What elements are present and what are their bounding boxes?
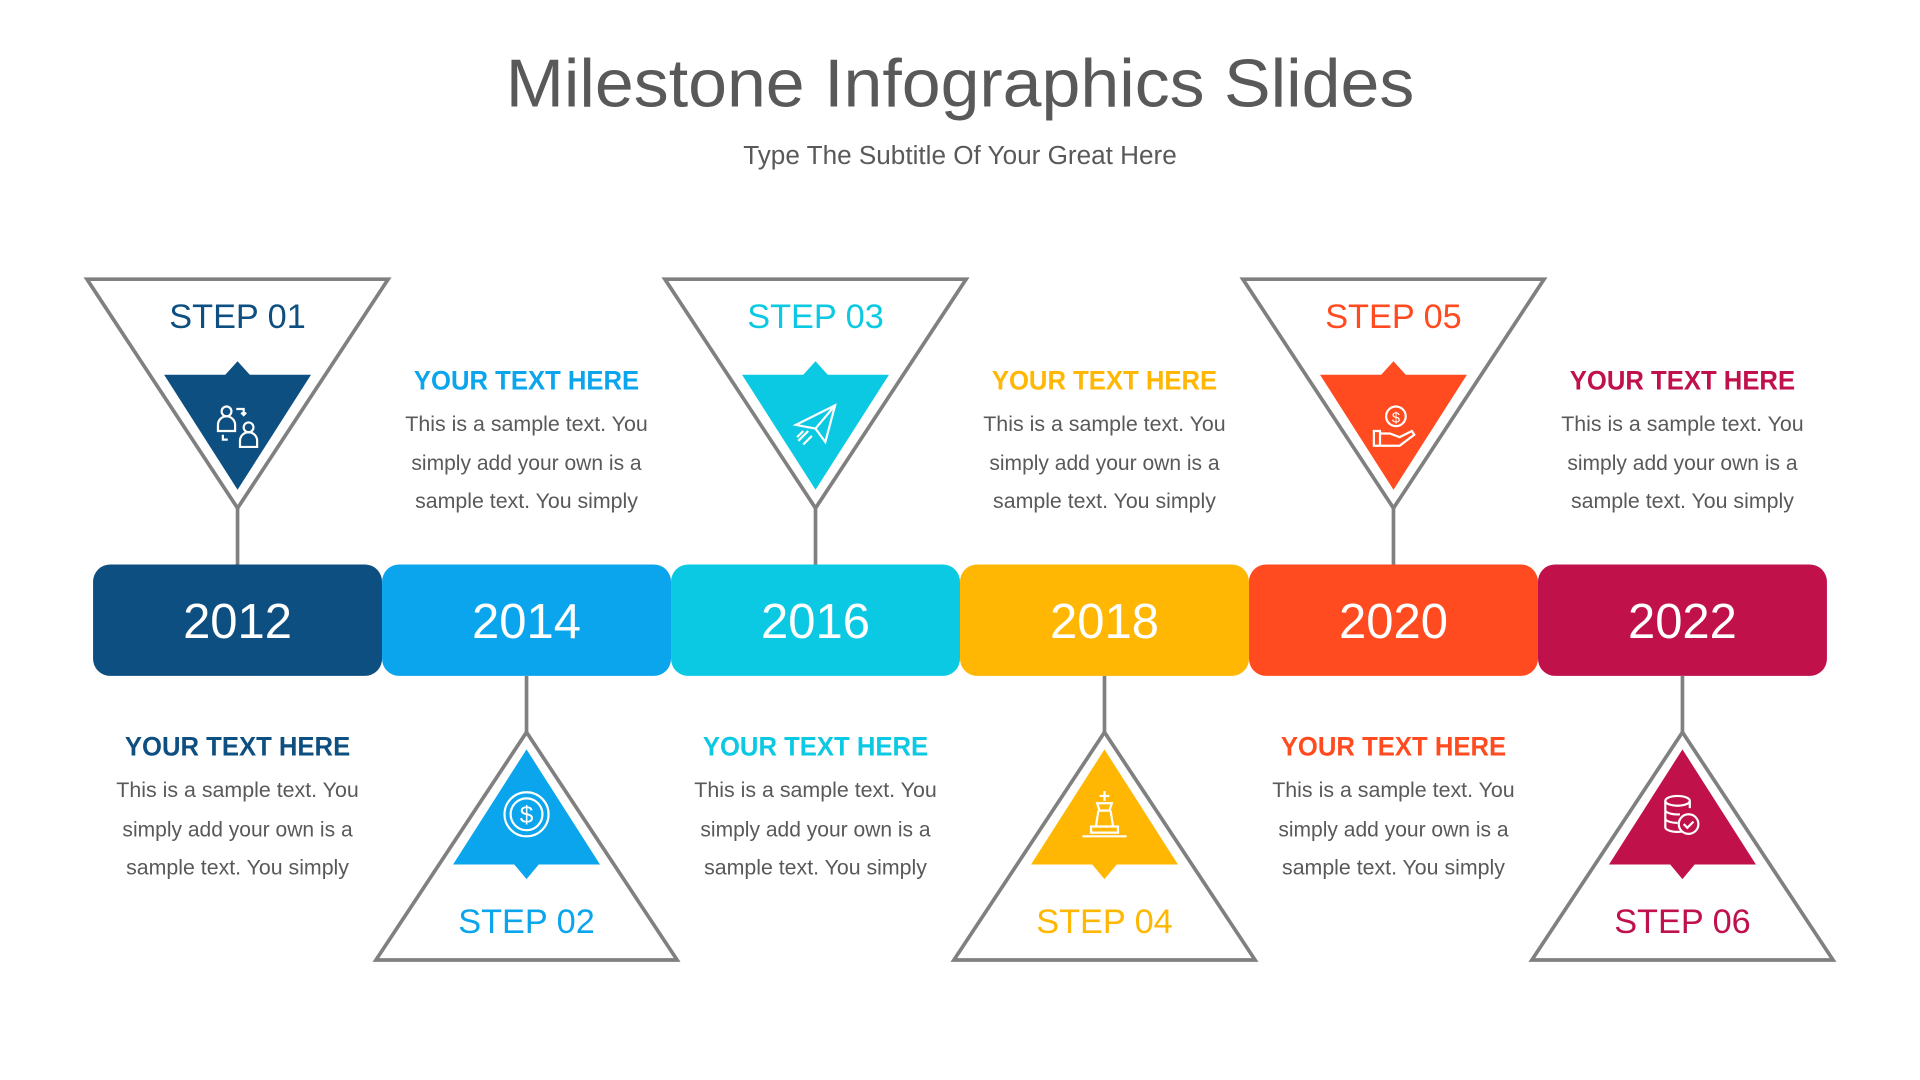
text block: 2014: sample text. You simply	[415, 490, 639, 513]
text block: 2012: This is a sample text. You	[116, 779, 359, 802]
text block: 2018: sample text. You simply	[993, 490, 1217, 513]
text block: 2016: YOUR TEXT HERE	[703, 732, 928, 762]
text block: 2014	[405, 365, 648, 513]
text block: 2016: sample text. You simply	[704, 856, 928, 879]
text block: 2020: This is a sample text. You	[1272, 779, 1515, 802]
step 04 marker	[954, 676, 1255, 960]
step 05 marker	[1243, 279, 1544, 564]
step 05 marker: STEP 05	[1325, 298, 1462, 336]
step 01 marker	[87, 279, 388, 564]
text block: 2014: This is a sample text. You	[405, 413, 648, 436]
title: Milestone Infographics Slides	[506, 47, 1414, 122]
text block: 2022	[1561, 365, 1804, 513]
icon: hand with coin	[1374, 407, 1414, 446]
icon: database check	[1665, 796, 1698, 834]
timeline year bars: 2018	[1050, 595, 1159, 649]
text block: 2012	[116, 732, 359, 879]
timeline year bars: 2020	[1339, 595, 1448, 649]
text block: 2014: simply add your own is a	[411, 452, 642, 475]
text block: 2020: sample text. You simply	[1282, 856, 1506, 879]
step 03 marker: STEP 03	[747, 298, 884, 336]
timeline year bars: 2014	[472, 595, 581, 649]
text block: 2012: simply add your own is a	[122, 818, 353, 841]
icon: chess king	[1082, 791, 1127, 836]
text block: 2022: YOUR TEXT HERE	[1570, 365, 1795, 395]
icon: people exchange	[218, 407, 257, 447]
text block: 2016	[694, 732, 937, 879]
text block: 2018: This is a sample text. You	[983, 413, 1226, 436]
text block: 2020: simply add your own is a	[1278, 818, 1509, 841]
subtitle: Type The Subtitle Of Your Great Here	[743, 142, 1177, 170]
step 02 marker	[376, 676, 677, 960]
timeline year bars: 2012	[183, 595, 292, 649]
text block: 2018	[983, 365, 1226, 513]
step 03 marker	[665, 279, 966, 564]
text block: 2020	[1272, 732, 1515, 879]
text block: 2012: YOUR TEXT HERE	[125, 732, 350, 762]
text block: 2022: simply add your own is a	[1567, 452, 1798, 475]
timeline year bars: 2022	[1628, 595, 1737, 649]
icon: hand with coin: $	[1392, 410, 1400, 426]
text block: 2022: sample text. You simply	[1571, 490, 1794, 513]
text block: 2020: YOUR TEXT HERE	[1281, 732, 1506, 762]
step 06 marker	[1532, 676, 1833, 960]
timeline year bars: 2016	[761, 595, 870, 649]
step 02 marker: STEP 02	[458, 903, 595, 941]
icon: dollar coin: $	[520, 802, 534, 829]
text block: 2016: simply add your own is a	[700, 818, 931, 841]
timeline year bars	[93, 564, 1827, 676]
step 06 marker: STEP 06	[1614, 903, 1751, 941]
text block: 2012: sample text. You simply	[126, 856, 350, 879]
text block: 2018: YOUR TEXT HERE	[992, 365, 1217, 395]
text block: 2022: This is a sample text. You	[1561, 413, 1804, 436]
text block: 2014: YOUR TEXT HERE	[414, 365, 639, 395]
step 01 marker: STEP 01	[169, 298, 306, 336]
step 04 marker: STEP 04	[1036, 903, 1173, 941]
text block: 2016: This is a sample text. You	[694, 779, 937, 802]
icon: dollar coin	[504, 792, 549, 836]
icon: paper plane	[796, 405, 835, 444]
text block: 2018: simply add your own is a	[989, 452, 1220, 475]
